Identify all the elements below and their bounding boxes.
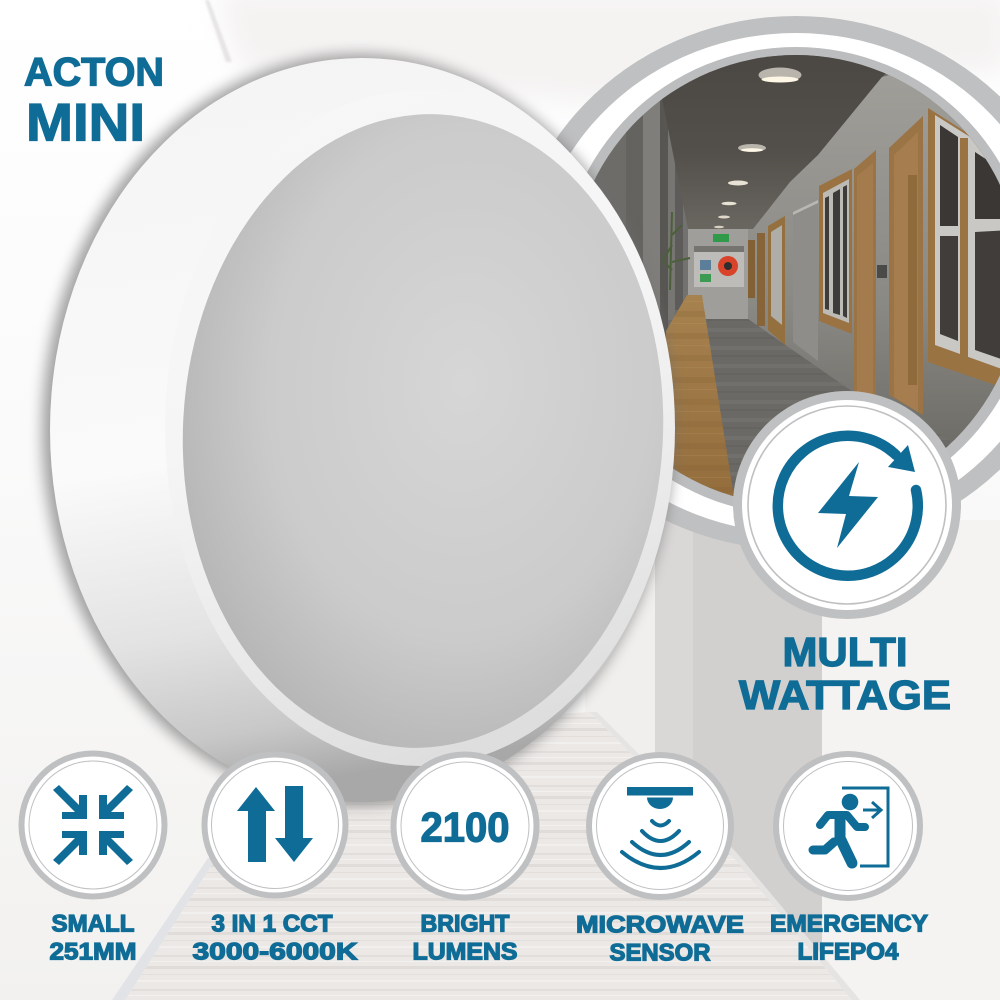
door two	[889, 116, 923, 415]
window one	[819, 169, 852, 334]
title	[24, 50, 164, 152]
right wall	[748, 75, 1000, 442]
feature: small: SMALL	[52, 910, 135, 938]
icon: up down arrows	[237, 786, 313, 862]
feature: 2100 lumens: BRIGHT	[420, 910, 510, 938]
far doors and windows	[748, 200, 818, 361]
icon: power cycle	[778, 436, 918, 576]
feature: 3 in 1 CCT: 3000-6000K	[192, 938, 358, 966]
ceiling lights	[714, 68, 802, 228]
feature: emergency: LIFEPO4	[798, 938, 899, 966]
feature: small	[18, 750, 168, 966]
feature: emergency: EMERGENCY	[770, 910, 928, 938]
label: multi wattage: MULTI	[782, 629, 908, 675]
hose panel	[694, 246, 744, 287]
feature: 3 in 1 CCT	[192, 752, 358, 966]
feature: 3 in 1 CCT: 3 IN 1 CCT	[212, 910, 333, 938]
feature: emergency	[770, 751, 928, 966]
icon: running exit	[813, 788, 888, 866]
feature: microwave sensor: SENSOR	[610, 940, 711, 966]
lens	[167, 102, 679, 760]
end wall	[688, 229, 748, 319]
title: MINI	[26, 94, 145, 152]
feature: microwave sensor	[576, 752, 744, 966]
left wall panels	[626, 95, 683, 337]
picture frame ring	[511, 16, 1000, 550]
badge: multi wattage	[733, 391, 961, 619]
wall switch	[877, 265, 887, 278]
feature: 2100 lumens: 2100	[420, 804, 510, 850]
window two	[928, 108, 1000, 390]
door one	[854, 150, 876, 395]
product: round bulkhead light	[42, 54, 679, 806]
feature: small: 251MM	[50, 938, 136, 966]
feature: 2100 lumens: LUMENS	[412, 938, 518, 966]
concrete floor	[706, 319, 950, 496]
plant	[662, 212, 690, 290]
exit sign	[713, 234, 729, 242]
label: multi wattage: WATTAGE	[739, 672, 951, 718]
wood strip	[666, 295, 734, 496]
feature: 2100 lumens	[390, 752, 540, 966]
icon: sensor waves	[622, 787, 699, 868]
front rim	[165, 90, 675, 766]
feature: microwave sensor: MICROWAVE	[576, 912, 744, 938]
icon: compress arrows	[53, 785, 133, 865]
label: multi wattage	[739, 629, 951, 718]
shadow	[42, 54, 674, 806]
housing	[50, 58, 674, 802]
ceiling	[662, 55, 886, 228]
title: ACTON	[24, 50, 164, 94]
corridor photo	[594, 55, 1000, 496]
